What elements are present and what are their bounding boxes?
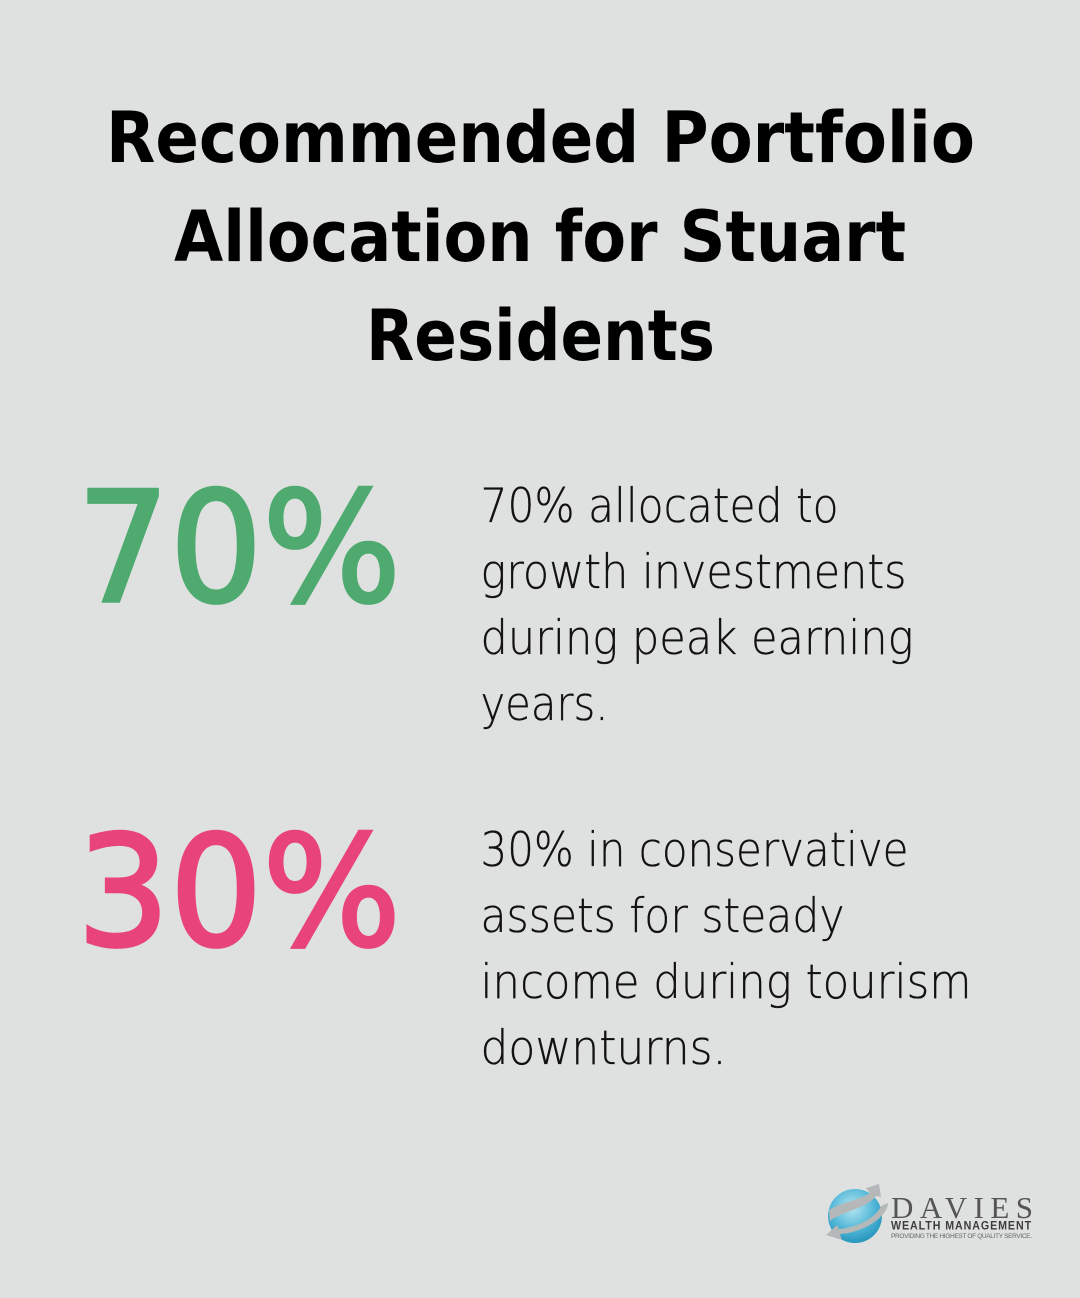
tagline: PROVIDING THE HIGHEST OF QUALITY SERVICE. <box>891 1233 1032 1240</box>
wordmark: DAVIES: DAVIES <box>891 1190 1033 1225</box>
stat: 30% conservative <box>77 804 972 1076</box>
description: 70% allocated <box>480 479 914 732</box>
big number: 70%: 70% <box>77 460 401 638</box>
description: 30% conservative: downturns. <box>480 1021 726 1076</box>
description: 70% allocated: during peak earning <box>480 611 914 666</box>
description: 30% conservative: income during tourism <box>480 955 972 1010</box>
title: Recommended Portfolio <box>106 97 975 179</box>
wordmark: WEALTH MANAGEMENT: WEALTH MANAGEMENT <box>891 1220 1032 1232</box>
title <box>106 97 975 377</box>
description: 30% conservative: assets for steady <box>480 889 844 944</box>
big number: 30%: 30% <box>77 804 401 982</box>
description: 70% allocated: 70% allocated to <box>480 479 838 534</box>
description: 70% allocated: years. <box>480 677 608 732</box>
logo: Davies Wealth Management <box>826 1184 1033 1243</box>
description: 70% allocated: growth investments <box>480 545 906 600</box>
description: 30% conservative <box>480 823 972 1076</box>
title: Residents <box>366 295 715 377</box>
description: 30% conservative: 30% in conservative <box>480 823 908 878</box>
stat: 70% growth <box>77 460 914 732</box>
icon: globe with arrows <box>826 1184 888 1243</box>
title: Allocation for Stuart <box>174 196 906 278</box>
